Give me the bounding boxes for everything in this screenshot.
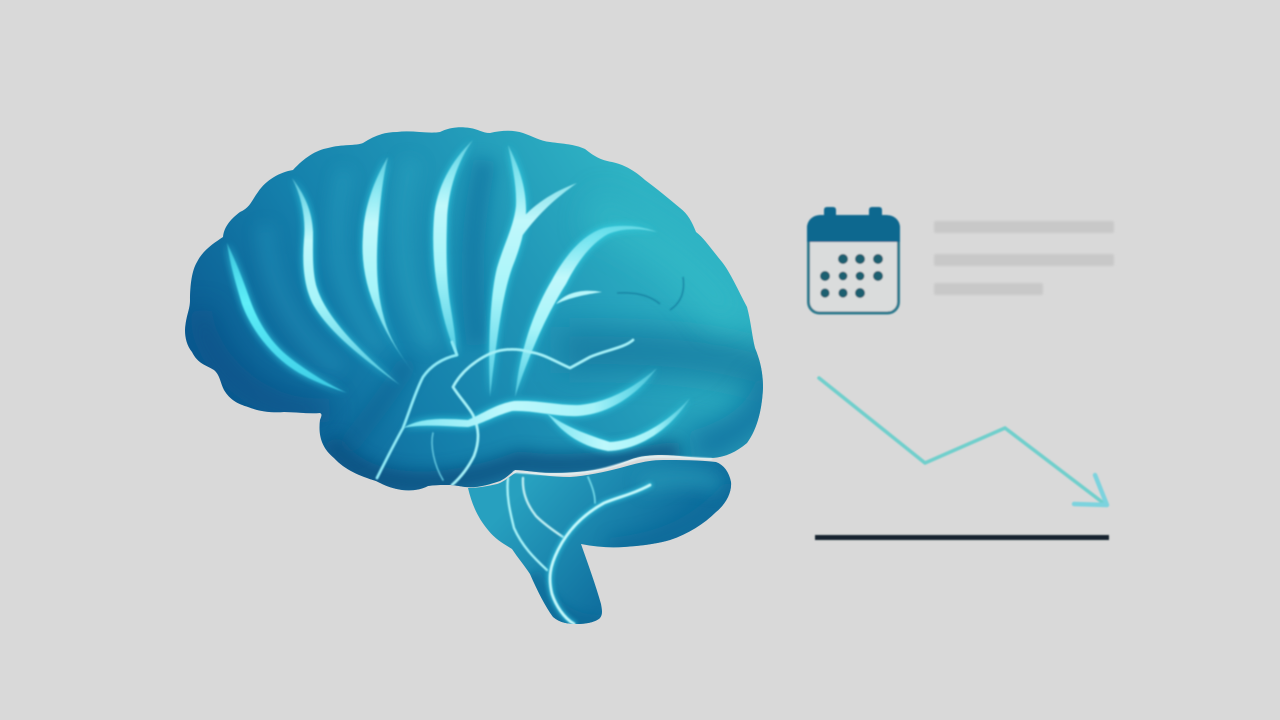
- arrow head: [1074, 475, 1107, 505]
- icon: calendar: [807, 207, 900, 313]
- nerve glow: [227, 140, 690, 451]
- chart baseline: [815, 535, 1109, 540]
- shading: broad tonal bands: [200, 160, 790, 482]
- nerve: main horizontal fissure: [403, 368, 657, 428]
- nerve: second sulcus: [292, 178, 400, 385]
- nerve: lower temporal sulcus: [547, 398, 690, 451]
- nerve: far-left sulcus: [227, 243, 347, 393]
- seam between cerebrum and cerebellum: [513, 457, 712, 474]
- calendar header: [807, 215, 900, 242]
- nerve: frontal branch: [515, 226, 657, 397]
- nerve: third sulcus: [362, 158, 403, 358]
- cerebellum: [468, 460, 735, 625]
- cerebellum nerve lines: [507, 477, 650, 624]
- faint dark crease: [617, 277, 684, 310]
- brain illustration: [185, 127, 790, 625]
- nerve: arch: [377, 340, 633, 485]
- calendar rings: [824, 207, 882, 216]
- nerve: fourth sulcus: [433, 140, 473, 357]
- cerebrum: [185, 127, 790, 490]
- placeholder text lines: [934, 221, 1114, 295]
- calendar date dots: [820, 254, 883, 298]
- nerve: forked central sulcus: [489, 145, 577, 397]
- chart: declining trend arrow: [819, 378, 1107, 505]
- calendar body: [808, 217, 898, 313]
